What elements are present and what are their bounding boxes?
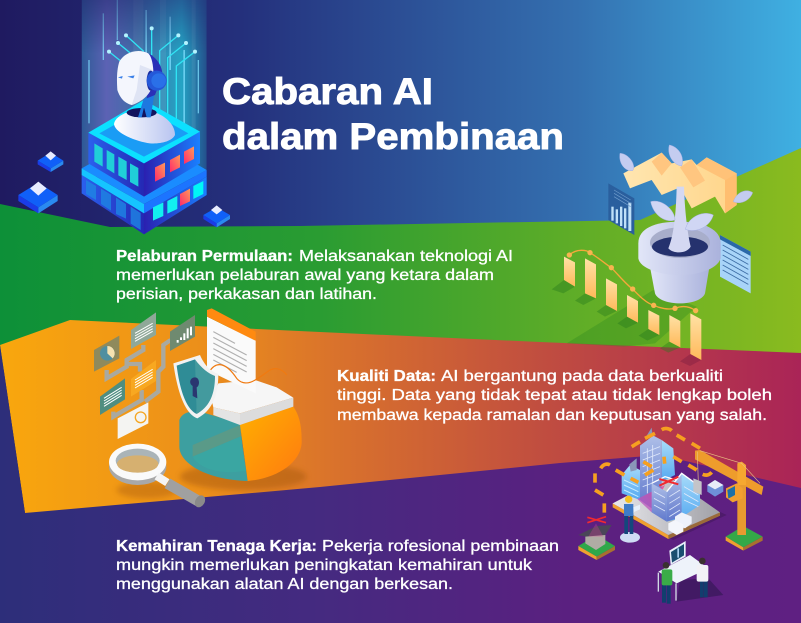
flight path: left loop xyxy=(595,464,610,513)
text block: Kualiti Data xyxy=(337,368,772,424)
stem xyxy=(668,187,691,252)
text block: Kualiti Data: tinggi. Data yang tidak tepat atau tidak lengkap boleh xyxy=(337,387,772,404)
background band: blue header xyxy=(0,0,801,260)
illustration: AI robot on server tower xyxy=(18,0,230,234)
floating panel: white card xyxy=(118,402,148,439)
magnifying glass xyxy=(109,444,207,509)
text block: Kemahiran Tenaga Kerja xyxy=(116,538,559,593)
site worker xyxy=(620,496,640,543)
background band: green xyxy=(0,148,801,370)
floating panel: grid xyxy=(170,315,195,351)
floating panel: notes xyxy=(131,312,156,349)
background band: purple xyxy=(0,345,801,623)
text block: Kualiti Data: AI bergantung pada data berkualiti xyxy=(441,368,723,385)
leaves on arrow xyxy=(620,145,753,203)
connector lines xyxy=(107,340,171,417)
text block: Pelaburan Permulaan: perisian, perkakasan dan latihan. xyxy=(116,286,377,303)
right data panel xyxy=(720,235,751,293)
title: Cabaran AI xyxy=(222,71,433,112)
text block: Pelaburan Permulaan: memerlukan pelaburan awal yang ketara dalam xyxy=(116,267,494,284)
crane xyxy=(693,450,763,551)
text block: Pelaburan Permulaan: Melaksanakan teknologi AI xyxy=(299,248,513,265)
leaves on stem xyxy=(651,201,713,230)
illustration: growth plant with charts xyxy=(552,145,753,366)
small cube: right xyxy=(203,205,230,227)
text block: Kualiti Data: membawa kepada ramalan dan keputusan yang salah. xyxy=(337,407,767,424)
ground shadow xyxy=(567,290,697,347)
tower upper tier xyxy=(88,100,200,197)
text block: Kemahiran Tenaga Kerja: mungkin memerlukan peningkatan kemahiran untuk xyxy=(116,557,532,574)
text block: Kemahiran Tenaga Kerja: Pekerja rofesional pembinaan xyxy=(322,538,559,555)
pie chart xyxy=(179,380,307,490)
text block: Kemahiran Tenaga Kerja: menggunakan alatan AI dengan berkesan. xyxy=(116,576,453,593)
drone over city xyxy=(659,477,678,486)
small cube: middle xyxy=(38,151,63,172)
text block: Pelaburan Permulaan: Pelaburan Permulaan: xyxy=(116,248,293,265)
platform xyxy=(613,475,727,540)
floating panel: pie xyxy=(94,336,119,372)
neck xyxy=(138,90,155,117)
flower pot xyxy=(638,222,721,303)
wave line xyxy=(209,365,287,383)
flight path segments xyxy=(616,428,712,482)
security shield xyxy=(173,355,218,418)
floating panel: teal notes xyxy=(100,378,125,415)
text block: Kualiti Data: Kualiti Data: xyxy=(337,368,436,385)
light beam xyxy=(82,0,207,177)
pink scan beam xyxy=(637,485,665,512)
neck opening xyxy=(127,108,157,117)
background band: orange to crimson xyxy=(0,320,801,513)
text block: Kemahiran Tenaga Kerja: Kemahiran Tenaga Kerja: xyxy=(116,538,317,555)
front building xyxy=(652,473,700,522)
document xyxy=(207,308,256,393)
title: dalam Pembinaan xyxy=(222,116,564,157)
tall building xyxy=(640,428,662,508)
circuit lines xyxy=(109,28,195,120)
robot head xyxy=(117,51,167,105)
floating panel: orange notes xyxy=(131,360,156,397)
storage block xyxy=(707,480,723,497)
back light building xyxy=(662,440,675,482)
arrow zigzag xyxy=(623,153,737,213)
illustration: smart construction site xyxy=(578,428,763,604)
left data panel xyxy=(608,183,634,235)
title xyxy=(222,71,564,157)
robot bust xyxy=(114,110,175,143)
tower lower tier xyxy=(82,133,207,234)
city block xyxy=(613,428,727,540)
rooftop boxes xyxy=(668,512,692,535)
bar chart with trend line xyxy=(552,250,701,366)
text block: Pelaburan Permulaan xyxy=(116,248,513,303)
left building xyxy=(622,458,640,500)
engineers at table xyxy=(658,541,723,604)
illustration: data security pie chart xyxy=(94,308,307,509)
small cube: large xyxy=(18,182,58,213)
delivery drone and box xyxy=(578,517,615,560)
